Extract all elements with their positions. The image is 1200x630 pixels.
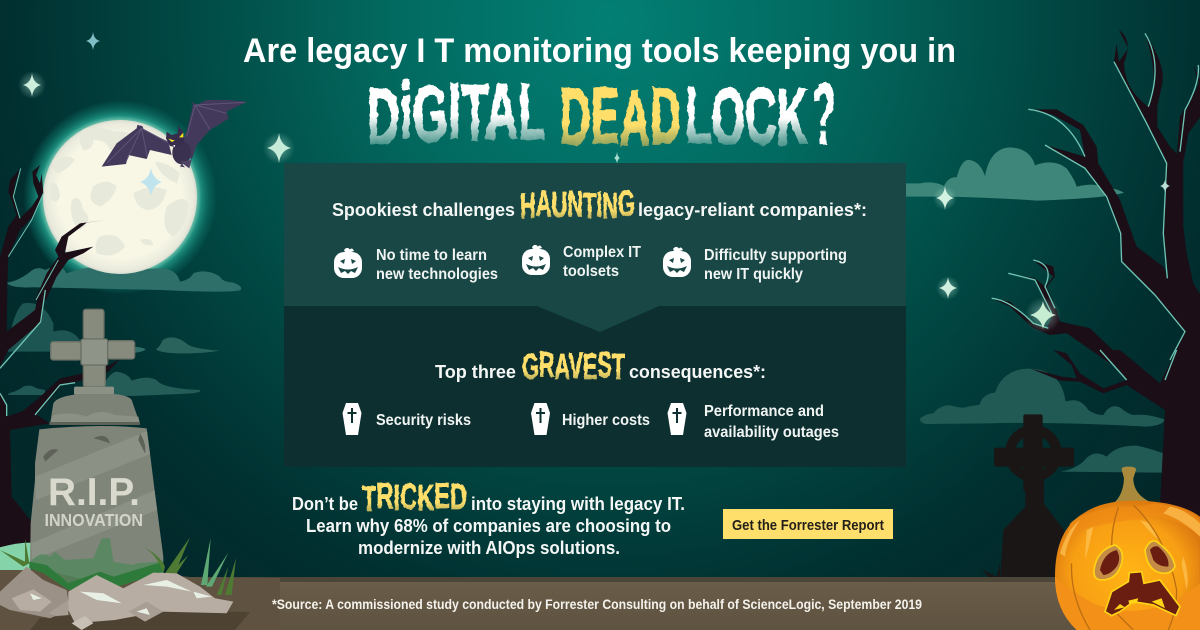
icon: jack-o-lantern [663,247,691,277]
item: no time to learn: new technologies [376,266,498,283]
stone body [30,426,163,583]
item: no time to learn: No time to learn [376,247,487,264]
title: digital deadlock: DEAD [560,71,681,163]
moon [43,120,197,274]
stars over tree [1025,180,1170,333]
title: digital deadlock: DiGITAL [367,66,546,161]
icon: jack-o-lantern [522,245,550,275]
pumpkin eyes [1094,541,1175,580]
celtic cross gravestone silhouette [982,414,1074,582]
stars [18,32,960,300]
item: difficulty supporting: Difficulty supporting [704,247,847,264]
cloud behind moon [7,267,241,292]
item: security risks: Security risks [376,412,471,429]
heading: consequences: GRAVEST [522,344,625,387]
pumpkin ribs [1072,505,1177,630]
content panel: consequences [284,306,906,467]
button: get the forrester report: Get the Forrester Report [732,517,884,534]
item: difficulty supporting: new IT quickly [704,266,803,283]
tombstone [0,309,236,630]
item: difficulty supporting [663,247,847,283]
source note: *Source: A commissioned study conducted by Forrester Consulting on behalf of ScienceLogic, September 2019 [272,597,922,612]
ground [0,568,1200,630]
call to action text: Learn why 68% of companies are choosing to [306,515,671,536]
title: Are legacy I T monitoring tools keeping you in [243,32,956,70]
call to action text: into staying with legacy IT. [471,493,685,514]
pumpkin mouth [1105,572,1180,616]
call to action text: modernize with AIOps solutions. [358,537,620,558]
heading: challenges: legacy-reliant companies*: [638,199,867,220]
clouds: right [900,147,1124,201]
R.I.P.: INNOVATION [44,510,143,530]
icon: coffin [531,403,550,435]
item: outages: Performance and [704,403,824,420]
clouds: left [7,303,220,396]
right tree [992,30,1200,630]
icon: coffin [668,403,686,435]
pumpkin body [1055,501,1200,630]
icon: coffin [342,403,362,435]
rocks [0,567,233,630]
title: digital deadlock: LOCK [685,71,808,161]
item: complex IT toolsets [522,244,641,280]
light green ground patch [0,543,31,570]
icon: jack-o-lantern [334,248,362,278]
pumpkin [1055,467,1200,630]
heading: consequences: Top three [435,361,516,382]
title: digital deadlock [367,64,836,163]
sparkle on moon [140,168,162,196]
item: complex IT toolsets: toolsets [563,263,619,280]
bat body [172,141,191,164]
heading: challenges: HAUNTING [520,183,635,226]
stone cross [51,309,135,387]
item: security risks [342,403,471,435]
bat head [166,126,184,147]
item: no time to learn [334,247,498,283]
item: complex IT toolsets: Complex IT [563,244,641,261]
item: higher costs: Higher costs [562,412,650,429]
item: outages: availability outages [704,424,839,441]
item: higher costs [531,403,650,435]
content panel: challenges [284,163,906,332]
bat [102,100,247,168]
text: ? [812,64,836,163]
moon craters [50,128,188,256]
call to action text: TRICKED [362,475,467,519]
moon halo [23,100,217,294]
heading: challenges [332,183,867,226]
pumpkin stem [1108,467,1149,508]
item: outages [668,403,839,441]
R.I.P.: R.I.P. [48,471,140,514]
heading: consequences: consequences*: [629,361,766,382]
moss [31,538,163,588]
plinth [74,387,114,395]
slab [50,394,140,424]
button: get the forrester report [723,509,893,539]
heading: challenges: Spookiest challenges [332,199,515,220]
call to action text: Don’t be [292,493,358,514]
grass [0,537,236,595]
left tree [0,165,121,550]
bat wings [102,125,172,167]
heading: consequences [435,344,766,387]
clouds: lower right [920,369,1164,473]
call to action text [292,475,685,558]
R.I.P. [44,471,143,530]
